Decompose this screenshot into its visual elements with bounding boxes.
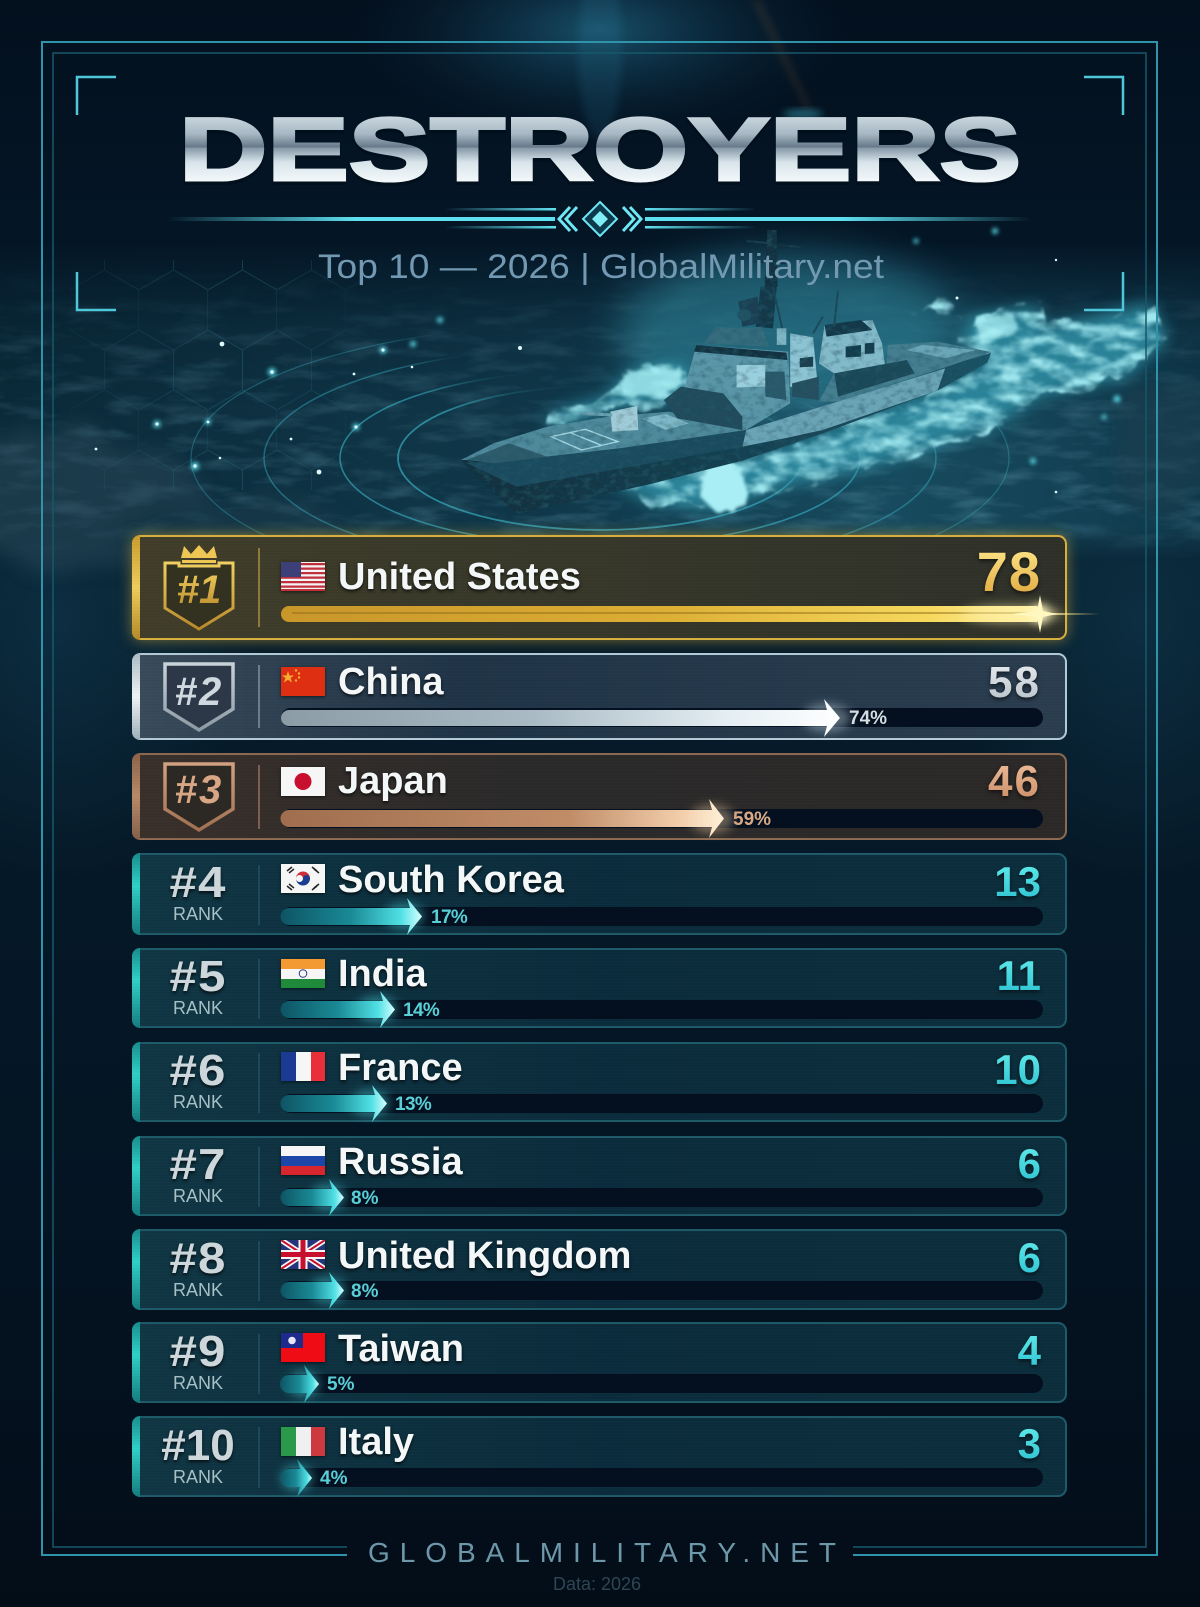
flag: United States [281,562,325,591]
rank #4: #4 [169,858,227,907]
progress bar 14% [280,990,1043,1028]
hexagon grid [70,260,366,490]
bow wave spray [620,313,1018,512]
radar rings [190,336,1010,535]
superstructure [677,345,790,430]
value 6: 6 [1018,1140,1041,1187]
rank caption: RANK [173,1467,223,1487]
hull [461,353,991,514]
country name: China [338,661,444,703]
corner brackets [77,77,1123,310]
row 2: China [132,653,1067,740]
flag: Japan [281,767,325,796]
percent label: 74% [849,708,887,729]
row 7: Russia [132,1136,1067,1216]
rank #9: #9 [169,1327,227,1376]
country name: France [338,1047,463,1089]
flag: India [281,959,325,988]
value 3: 3 [1018,1420,1041,1467]
rank badge #1 with crown: #1 [177,568,221,612]
progress bar 8% [280,1272,1043,1309]
rank badge #2: #2 [175,670,223,714]
progress bar 74% [281,699,1043,737]
flag: Russia [281,1146,325,1175]
country name: Taiwan [338,1328,464,1370]
country name: India [338,953,427,995]
percent label: 4% [320,1468,347,1489]
percent label: 5% [327,1374,354,1395]
value 78: 78 [977,540,1041,603]
title: DESTROYERS [179,102,1021,202]
rank #10: #10 [161,1421,235,1470]
subtitle: Top 10 — 2026 | GlobalMilitary.net [318,248,885,286]
fog [0,380,1200,571]
percent label: 59% [733,809,771,830]
ship wake underlay [547,302,1167,510]
country name: United States [338,556,581,598]
particles [95,228,1121,493]
percent label: 17% [431,907,467,928]
flag: South Korea [281,864,325,893]
flag: Italy [281,1427,325,1456]
rank caption: RANK [173,1092,223,1112]
value 11: 11 [997,952,1041,999]
progress bar 8% [280,1179,1043,1216]
value 6: 6 [1018,1234,1041,1281]
progress bar 4% [276,1459,1043,1497]
rank caption: RANK [173,1373,223,1393]
rank #8: #8 [169,1234,227,1283]
rank caption: RANK [173,1280,223,1300]
rank badge #3: #3 [175,768,223,812]
row 8: United Kingdom [132,1229,1067,1310]
progress bar 5% [280,1365,1043,1403]
rank #5: #5 [169,952,227,1001]
ocean [0,240,1200,560]
ship wake and foam [547,302,1167,510]
country name: Italy [338,1421,414,1463]
rear deck [819,342,991,402]
rank #6: #6 [169,1046,227,1095]
progress bar 17% [280,898,1043,935]
footer brand: GLOBALMILITARY.NET [368,1537,836,1568]
value 13: 13 [994,858,1041,905]
country name: Russia [338,1141,463,1183]
footer data note: Data: 2026 [553,1574,641,1594]
row 9: Taiwan [132,1322,1067,1403]
row 3: Japan [132,753,1067,840]
country name: United Kingdom [338,1235,631,1277]
rank caption: RANK [173,998,223,1018]
percent label: 8% [351,1281,378,1302]
rank caption: RANK [173,904,223,924]
value 58: 58 [988,658,1041,707]
side glow [0,360,1200,880]
rank badge #3 [163,762,235,832]
top light beams [350,0,850,140]
flag: United Kingdom [281,1240,325,1269]
flag: China [281,667,325,696]
flag: Taiwan [281,1333,325,1362]
row 6: France [132,1042,1067,1122]
rank #7: #7 [169,1140,227,1189]
rank caption: RANK [173,1186,223,1206]
mast [756,287,777,328]
gun [610,406,638,432]
percent label: 8% [351,1188,378,1209]
value 46: 46 [988,757,1041,806]
row 5: India [132,948,1067,1028]
percent label: 14% [403,1000,439,1021]
value 4: 4 [1018,1327,1041,1374]
progress bar 59% [280,799,1043,838]
country name: Japan [338,760,448,802]
rank badge #1 with crown [164,545,234,631]
rank badge #2 [163,662,235,732]
progress bar 100% [281,595,1098,633]
title divider ornament [165,202,1033,236]
row 10: Italy [132,1416,1067,1497]
destroyer ship [461,230,991,514]
row 1: United States [132,535,1067,640]
foredeck [461,412,746,460]
country name: South Korea [338,859,564,901]
flag: France [281,1052,325,1081]
title: DESTROYERS [179,99,1021,199]
percent label: 13% [395,1094,431,1115]
value 10: 10 [994,1046,1041,1093]
progress bar 13% [280,1084,1043,1122]
row 4: South Korea [132,853,1067,935]
